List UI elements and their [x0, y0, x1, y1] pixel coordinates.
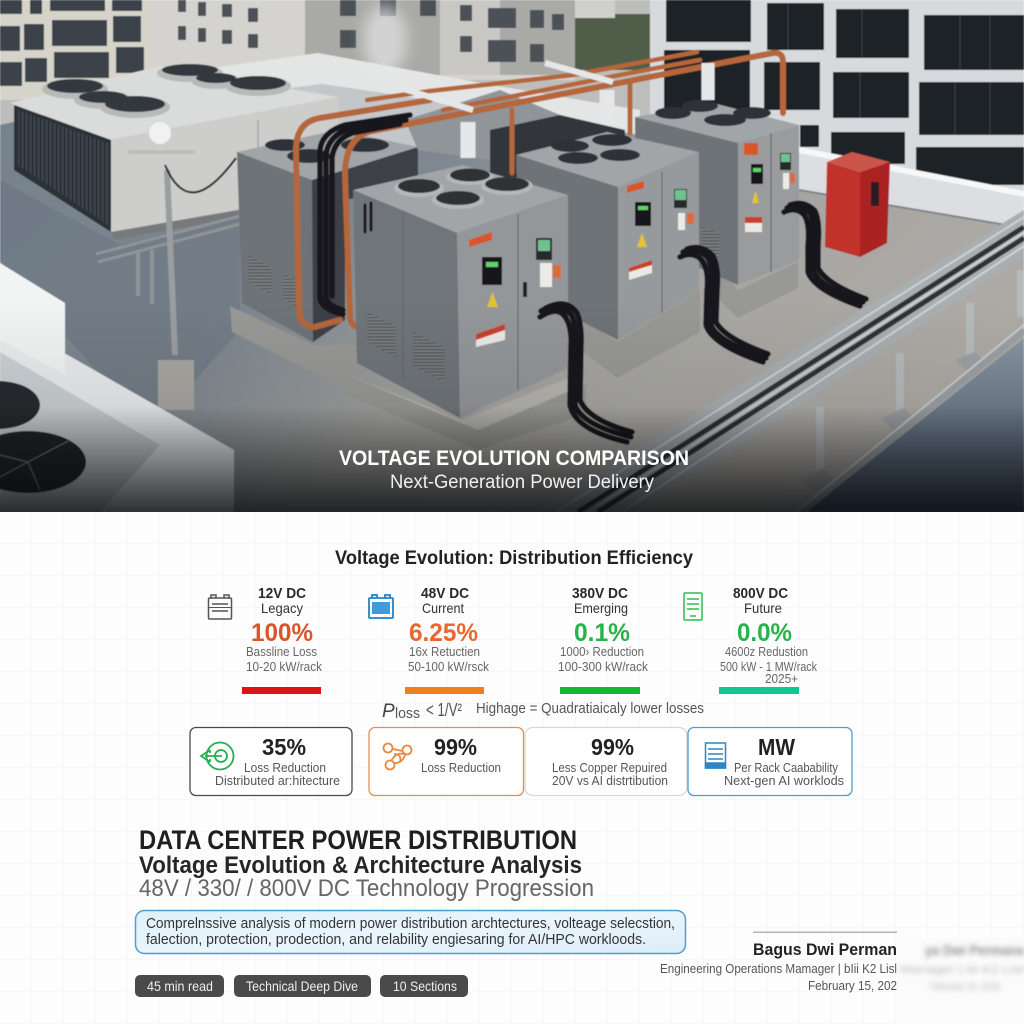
description box — [136, 910, 686, 954]
stat card: MW — [688, 728, 852, 796]
main title block: Voltage Evolution & Architecture Analysis — [139, 852, 582, 879]
cabinet 1 — [353, 165, 568, 418]
white insulated pipe risers — [397, 63, 708, 158]
stat card: 35% — [190, 728, 352, 796]
hero caption: Next-Generation Power Delivery — [390, 472, 654, 493]
column: 48V DC — [369, 586, 490, 694]
hero photo: rooftop power equipment — [0, 0, 1024, 512]
main title block: 48V / 330/ / 800V DC Technology Progression — [139, 875, 594, 902]
formula line — [382, 700, 704, 722]
column: 12V DC — [208, 586, 323, 694]
red fire cabinet — [825, 152, 890, 257]
column: 12V DC: 10-20 kW/rack — [246, 660, 323, 674]
air handling unit — [10, 64, 340, 240]
tag: read time: 45 min read — [147, 978, 213, 994]
black power cables — [320, 115, 866, 442]
copper pipes — [296, 52, 783, 328]
column: 48V DC: 50-100 kW/rsck — [408, 660, 490, 674]
icon: green target arrow — [201, 742, 234, 770]
cabinet 2 — [237, 130, 418, 342]
column: 48V DC: 16x Retuctien — [409, 645, 480, 659]
column: 12V DC: 100% — [251, 619, 313, 647]
stat card: 99% less copper — [525, 728, 687, 796]
tag: technical deep dive: Technical Deep Dive — [246, 978, 358, 994]
column: 380V DC: 100-300 kW/rack — [558, 660, 649, 674]
column: 380V DC: 0.1% — [574, 619, 630, 647]
icon: orange linked nodes — [384, 744, 412, 770]
formula line: loss — [395, 705, 420, 722]
description box: falection, protection, prodection, and relability engiesaring for AI/HPC workloods. — [146, 931, 646, 948]
stat card: 99% less copper: Less Copper Repuired — [552, 760, 667, 775]
column: 12V DC: Bassline Loss — [246, 645, 317, 659]
formula line: < 1/V² — [426, 700, 462, 720]
stat card: 99% less copper: 20V vs AI distrtibution — [552, 773, 668, 788]
column: 380V DC: 380V DC — [572, 586, 628, 602]
author block: Engineering Operations Mamager | bIii K2 Lisl — [660, 961, 897, 976]
column: 12V DC: 12V DC — [258, 586, 306, 602]
section heading: Voltage Evolution: Distribution Efficiency — [335, 548, 693, 569]
roof floor — [0, 85, 1024, 512]
icon: green server — [684, 593, 702, 620]
stat card: 99% loss reduction — [369, 728, 524, 796]
icon: grey battery — [208, 595, 232, 619]
stat card: MW: Next-gen AI worklods — [724, 773, 844, 788]
tag: read time — [135, 975, 224, 997]
main title block — [139, 825, 594, 902]
icon: blue battery — [369, 595, 393, 618]
cabinet 4 — [635, 100, 799, 285]
hero caption: VOLTAGE EVOLUTION COMPARISON — [339, 447, 689, 470]
plinths — [230, 262, 798, 450]
column: 48V DC: 6.25% — [409, 619, 478, 647]
blurred ghost patch — [897, 938, 1024, 1024]
tray supports — [796, 270, 1024, 512]
column: 380V DC: Emerging — [574, 600, 628, 616]
formula line: P — [382, 701, 395, 722]
hero caption — [339, 450, 688, 492]
smoke plume — [363, 4, 407, 76]
blurred ghost patch: Manager | AI K2 List — [900, 964, 1024, 976]
back parapet wall — [155, 53, 1024, 228]
main title block: DATA CENTER POWER DISTRIBUTION — [139, 825, 577, 855]
blurred ghost patch: February 15, 2026 — [930, 981, 1000, 993]
stat card: 35%: Loss Reduction — [244, 760, 326, 775]
tag: technical deep dive — [234, 975, 371, 997]
rear cabinet in shadow — [408, 90, 626, 178]
column: 380V DC: 1000› Reduction — [560, 645, 644, 659]
icon: blue server — [706, 743, 726, 768]
column: 12V DC: Legacy — [261, 600, 303, 616]
column: 48V DC: Current — [422, 600, 464, 616]
column: 380V DC — [558, 586, 649, 694]
cable tray — [535, 210, 1024, 512]
background buildings — [0, 0, 1024, 192]
column: 800V DC: 0.0% — [737, 619, 792, 647]
column: 800V DC: 4600z Redustion — [725, 645, 808, 659]
cabinet 3 — [516, 132, 699, 340]
column: 800V DC: 2025+ — [765, 672, 798, 686]
author block: Bagus Dwi Perman — [753, 940, 897, 959]
author block — [660, 932, 897, 993]
dark caption gradient — [0, 346, 1024, 512]
column: 800V DC: Future — [744, 600, 782, 616]
author block: February 15, 202 — [808, 978, 897, 993]
left white rooftop unit — [0, 263, 234, 512]
column: 800V DC: 800V DC — [733, 586, 788, 602]
formula line: Highage = Quadratiaicaly lower losses — [476, 700, 704, 717]
stat card: 99% loss reduction: 99% — [434, 734, 477, 760]
stat card: 99% loss reduction: Loss Reduction — [421, 760, 501, 775]
stat card: 99% less copper: 99% — [591, 734, 634, 760]
column: 48V DC: 48V DC — [421, 586, 469, 602]
tag: sections: 10 Sections — [393, 978, 457, 994]
stat card: 35%: 35% — [262, 734, 306, 760]
stat card: MW: Per Rack Caabability — [734, 760, 838, 775]
weather mast — [128, 122, 236, 410]
tag: sections — [380, 975, 468, 997]
column: 800V DC — [684, 586, 818, 694]
column: 800V DC: 500 kW - 1 MW/rack — [720, 660, 818, 674]
pipe rack on roof — [96, 216, 240, 304]
description box: Comprelnssive analysis of modern power distribution archtectures, volteage selecstion, — [146, 915, 675, 932]
stat card: MW: MW — [758, 734, 795, 760]
stat card: 35%: Distributed ar:hitecture — [215, 773, 340, 788]
